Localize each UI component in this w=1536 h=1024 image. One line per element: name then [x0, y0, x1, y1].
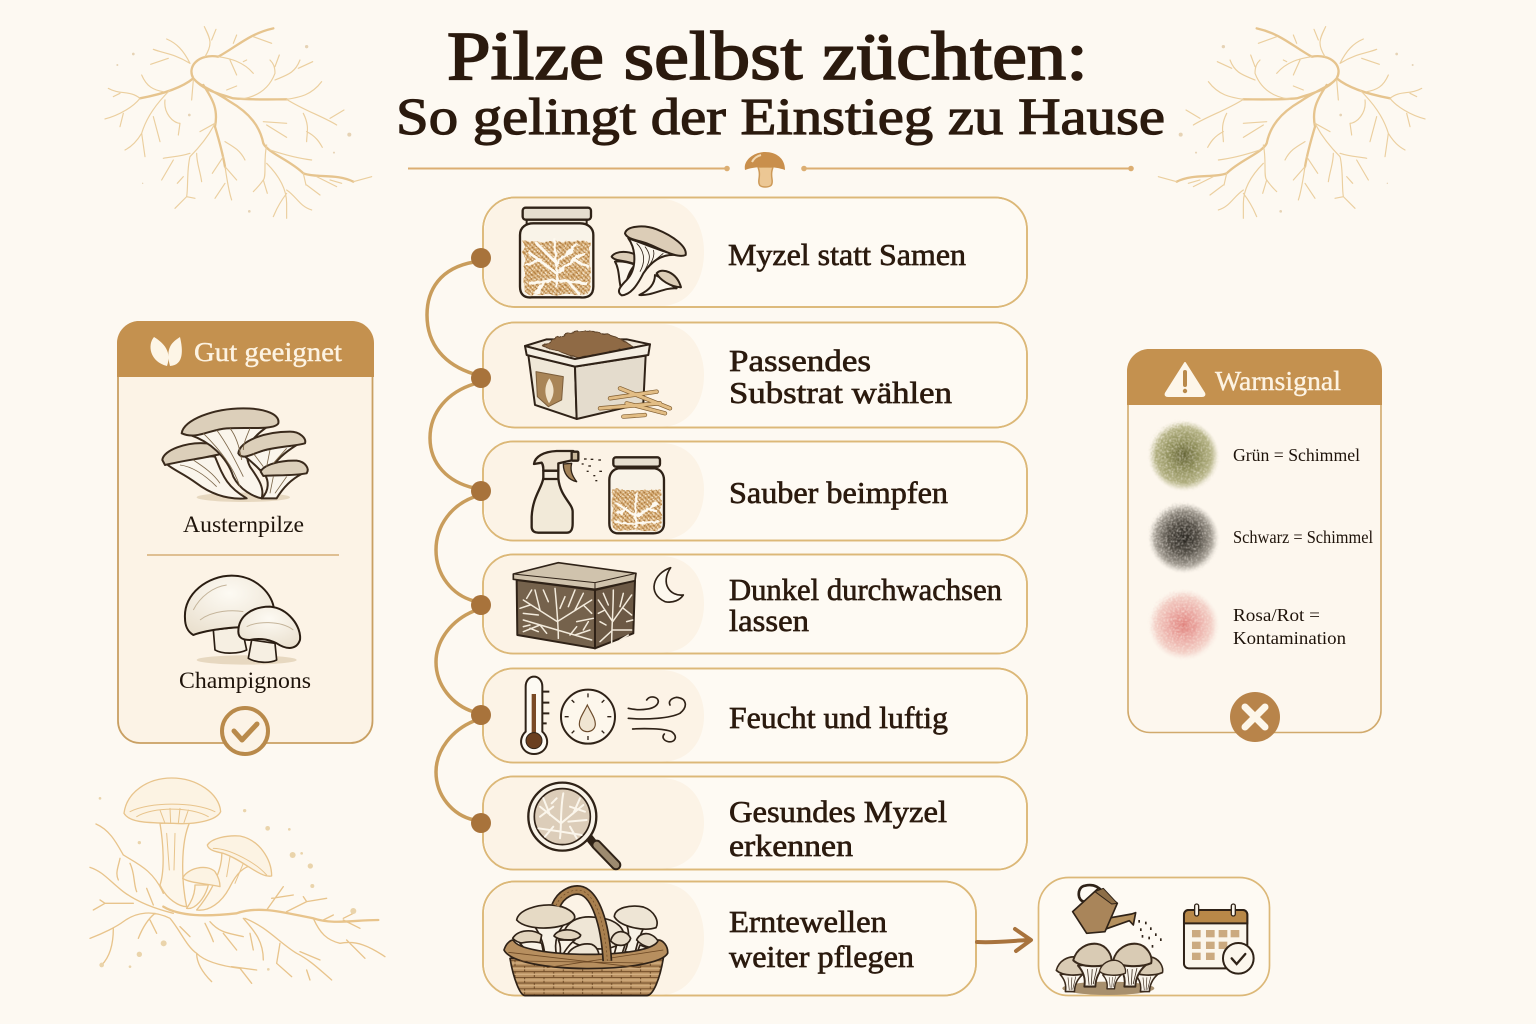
icon: small jar — [609, 457, 664, 533]
step 4 card: Dunkel durchwachsen lassen — [483, 554, 1027, 654]
divider with mushroom icon — [408, 152, 1134, 187]
heading: Warnsignal — [1215, 366, 1341, 396]
decoration: mycelium top right — [1158, 27, 1425, 218]
panel: Gut geeignet — [117, 321, 374, 754]
label: pink — [1233, 605, 1346, 648]
label: pink: Kontamination — [1233, 628, 1346, 648]
icon: oyster mushrooms — [612, 226, 686, 295]
step 6 card: Gesundes Myzel erkennen — [483, 776, 1027, 870]
icon: dark box with mycelium — [513, 563, 636, 648]
decoration: mushrooms and mycelium bottom left — [90, 778, 385, 983]
icon: thermometer — [521, 677, 549, 754]
step 5 card: Feucht und luftig — [483, 668, 1027, 762]
label: Sauber beimpfen — [729, 475, 949, 510]
icon: basket of mushrooms — [504, 890, 668, 996]
step 1 card: Myzel statt Samen — [483, 198, 1027, 307]
icon: mushroom cluster — [1056, 944, 1163, 995]
label: Feucht und luftig — [729, 700, 948, 735]
label: Erntewellen — [729, 904, 888, 939]
icon: jar with mycelium — [520, 208, 593, 297]
icon: calendar with check — [1184, 904, 1254, 974]
step 7 card: Erntewellen weiter pflegen — [483, 882, 976, 996]
icon: substrate container with straw — [525, 331, 670, 419]
icon: humidity dial — [561, 690, 615, 744]
icon: champignons — [185, 576, 300, 665]
title — [396, 18, 1165, 146]
step connectors — [427, 262, 474, 820]
panel header — [1127, 349, 1382, 405]
icon: oyster mushrooms — [162, 408, 308, 502]
label: Dunkel durchwachsen — [729, 572, 1002, 607]
step 7 card: Erntewellen weiter pflegen: weiter pflegen — [729, 939, 915, 974]
label: green: Grün = Schimmel — [1233, 445, 1360, 465]
icon: watering can — [1073, 885, 1162, 948]
mould sample: green — [1149, 421, 1219, 491]
icon: warning triangle — [1166, 363, 1204, 396]
label: pink: Rosa/Rot = — [1233, 605, 1320, 625]
label: black: Schwarz = Schimmel — [1233, 527, 1373, 547]
icon: spray bottle — [532, 451, 602, 533]
title line 2: So gelingt der Einstieg zu Hause — [396, 89, 1165, 146]
icon: wind — [628, 697, 685, 742]
icon: crescent moon — [654, 568, 683, 602]
label: Myzel statt Samen — [728, 237, 967, 272]
card: watering and calendar — [1038, 878, 1270, 996]
heading: Gut geeignet — [194, 337, 343, 367]
label: Austernpilze: Austernpilze — [183, 512, 304, 537]
label: Champignons: Champignons — [179, 668, 311, 693]
title line 1: Pilze selbst züchten: — [447, 18, 1088, 94]
panel: Warnsignal — [1127, 349, 1382, 742]
icon: cross badge — [1230, 692, 1280, 742]
icon: magnifying glass — [528, 783, 616, 865]
decoration: mycelium top left — [105, 27, 372, 218]
step 4 card: Dunkel durchwachsen lassen: lassen — [729, 603, 810, 638]
icon: leaves — [150, 337, 182, 366]
step 3 card: Sauber beimpfen — [483, 442, 1027, 540]
icon: check badge — [222, 708, 268, 754]
step 2 card: Passendes Substrat wählen — [483, 322, 1027, 428]
mould sample: pink — [1149, 590, 1219, 660]
label: Gesundes Myzel — [729, 794, 947, 829]
step 6 card: Gesundes Myzel erkennen: erkennen — [729, 828, 854, 863]
mould sample: black — [1149, 503, 1219, 573]
panel header — [117, 321, 374, 377]
step markers — [471, 248, 491, 833]
arrow to care card — [977, 929, 1031, 951]
step 2 card: Passendes Substrat wählen: Substrat wählen — [729, 375, 953, 410]
label: Passendes — [729, 343, 871, 378]
